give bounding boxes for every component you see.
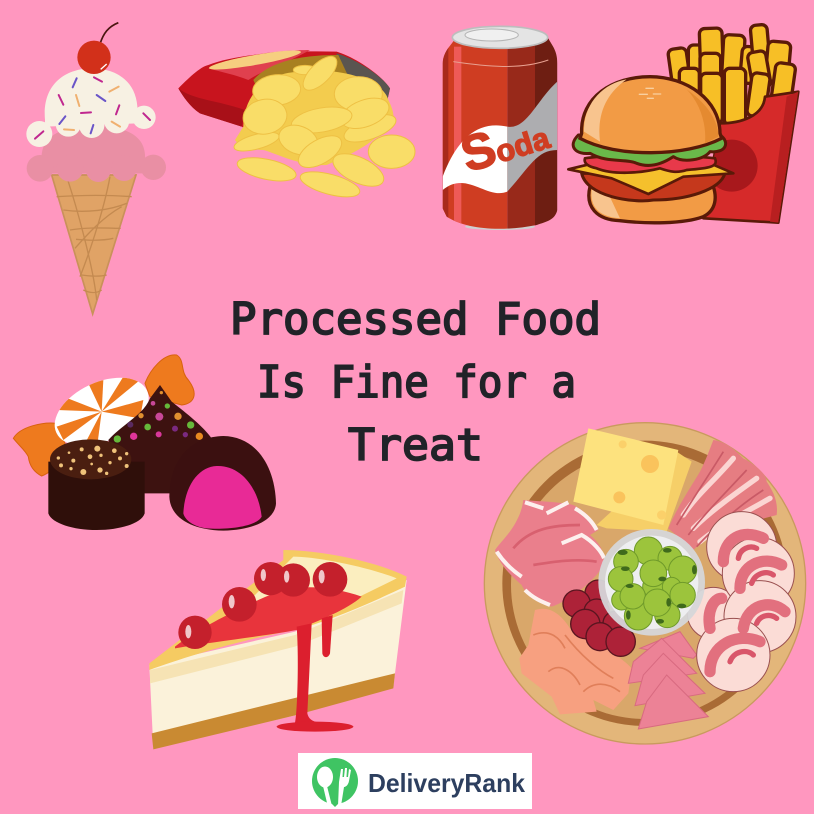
title	[230, 294, 601, 471]
icon: cheeseburger	[568, 77, 733, 223]
icon: candy and chocolates	[13, 355, 276, 531]
cheese slices	[573, 428, 692, 532]
icon: ice cream cone	[26, 23, 166, 314]
salmon slices	[519, 609, 632, 714]
icon: bag of potato chips	[178, 47, 415, 202]
ham slices	[495, 500, 604, 607]
bacon strips	[668, 440, 777, 550]
rolled meat slices	[687, 512, 796, 692]
title line 3: Treat	[348, 420, 483, 471]
title line 2: Is Fine for a	[257, 357, 576, 408]
logo: DeliveryRank	[298, 753, 532, 809]
icon: charcuterie board	[484, 423, 806, 744]
icon: cheesecake slice with berries	[149, 550, 407, 749]
icon: soda can	[440, 26, 558, 233]
label: Soda: Soda	[454, 104, 556, 183]
bowl of green olives	[598, 529, 705, 636]
icon: french fries	[668, 24, 798, 223]
wooden board	[484, 423, 806, 744]
salami slices	[563, 580, 635, 656]
title line 1: Processed Food	[230, 294, 601, 345]
icon: green spoon and fork badge	[312, 758, 358, 807]
wordmark: DeliveryRank	[368, 768, 526, 798]
mortadella wedges	[628, 632, 708, 729]
